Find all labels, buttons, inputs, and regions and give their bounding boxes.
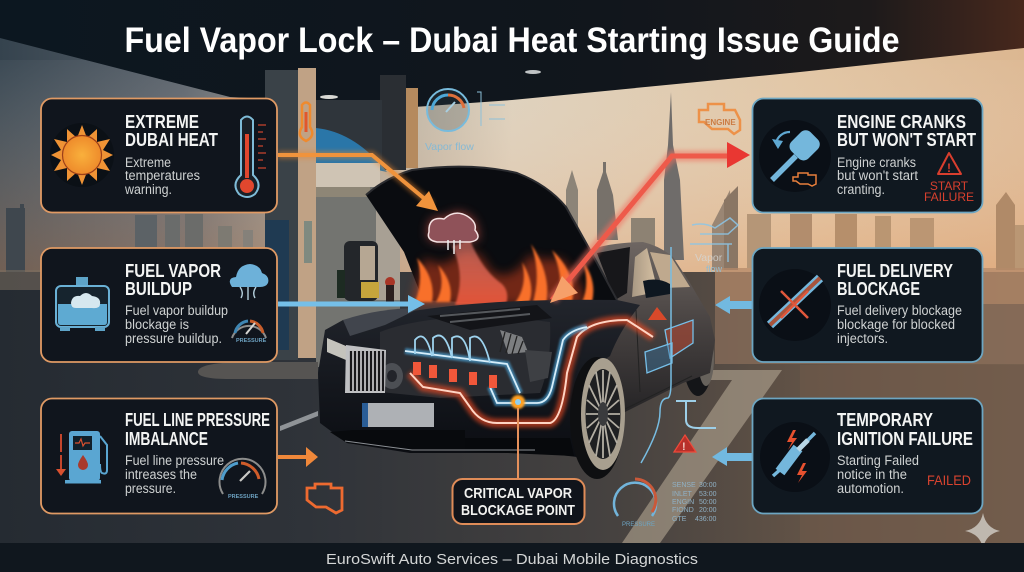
heading: BLOCKAGE bbox=[837, 279, 920, 299]
description: Fuel vapor buildup bbox=[125, 303, 228, 318]
description: automotion. bbox=[837, 481, 904, 496]
critical point glow bbox=[511, 395, 525, 409]
description: pressure buildup. bbox=[125, 331, 222, 346]
rear wheel bbox=[683, 320, 713, 396]
arrow: ignition to car bbox=[712, 447, 752, 466]
panel: fuel line pressure imbalance bbox=[41, 398, 277, 514]
arrow: blockage to car bbox=[715, 296, 752, 314]
parking line bbox=[622, 370, 782, 543]
heading: EXTREME bbox=[125, 112, 199, 132]
description bbox=[837, 155, 918, 197]
icon: check engine outline top: ENGINE bbox=[705, 118, 736, 127]
heading: IGNITION FAILURE bbox=[837, 429, 973, 449]
description bbox=[124, 155, 200, 197]
canopy lights bbox=[320, 95, 338, 99]
icon: cloud bbox=[230, 264, 268, 300]
blue station sign bbox=[265, 220, 289, 350]
description: Fuel delivery blockage bbox=[837, 303, 962, 318]
arrow: failure to start card bbox=[550, 142, 750, 303]
door shut line bbox=[623, 310, 692, 410]
icon: pressure gauge: PRESSURE bbox=[228, 494, 259, 500]
car bbox=[318, 167, 715, 479]
data gauge with readings: FIOND bbox=[672, 507, 694, 514]
footer band: EuroSwift Auto Services – Dubai Mobile Diagnostics bbox=[326, 552, 698, 568]
panel: extreme dubai heat bbox=[41, 98, 277, 212]
callout: critical vapor blockage point bbox=[452, 479, 584, 524]
vapor cloud icon in hood bbox=[427, 212, 479, 254]
flames under hood bbox=[412, 240, 593, 305]
icon: thermometer bbox=[235, 116, 266, 197]
icon: fuel pump bbox=[56, 431, 107, 484]
heading: IMBALANCE bbox=[125, 429, 208, 449]
station wall behind pump bbox=[316, 187, 400, 367]
icon: vapor flow schematic right bbox=[690, 218, 738, 274]
icon: start failure warning: ! bbox=[947, 161, 951, 175]
icon: pressure gauge: PRESSURE bbox=[236, 338, 267, 344]
icon: vapor flow schematic right: flow bbox=[706, 264, 723, 274]
canopy ceiling bbox=[0, 0, 1024, 108]
description: Starting Failed bbox=[837, 453, 919, 468]
description: Fuel line pressure bbox=[125, 453, 224, 468]
icon: check engine outline top bbox=[699, 104, 740, 134]
schematic line below car bbox=[641, 247, 671, 463]
heading: TEMPORARY bbox=[837, 410, 933, 430]
description: notice in the bbox=[837, 467, 907, 482]
heading: DUBAI HEAT bbox=[125, 130, 218, 150]
heading: BUT WON'T START bbox=[837, 130, 976, 150]
lower grille and lip bbox=[330, 430, 465, 451]
heading bbox=[837, 112, 976, 150]
panel: temporary ignition failure bbox=[752, 398, 982, 514]
windshield bbox=[597, 247, 630, 300]
arrow: vapor to engine bbox=[278, 295, 425, 313]
heading bbox=[837, 261, 953, 299]
description bbox=[125, 303, 228, 346]
description: blockage for blocked bbox=[837, 317, 955, 332]
arrow: heat into hood bbox=[278, 155, 438, 211]
panel: engine cranks but won't start bbox=[752, 98, 982, 212]
ground bbox=[0, 272, 1024, 572]
pump island bbox=[198, 362, 318, 379]
heading: ENGINE CRANKS bbox=[837, 112, 966, 132]
pillars bbox=[265, 70, 298, 360]
heading: FUEL LINE PRESSURE bbox=[125, 410, 270, 430]
description bbox=[837, 303, 962, 346]
icon: ground schematic and warning bbox=[674, 401, 716, 453]
heading: BUILDUP bbox=[125, 279, 192, 299]
data gauge with readings: 20:00 bbox=[699, 507, 717, 514]
description: warning. bbox=[124, 182, 172, 197]
icon: key with engine light bbox=[759, 120, 831, 192]
icon: ground schematic and warning: ! bbox=[682, 441, 686, 453]
side mirror bbox=[643, 280, 670, 298]
icon: vapor flow gauge: Vapor flow bbox=[425, 141, 474, 153]
data gauge with readings: 50:00 bbox=[699, 499, 717, 506]
callout: critical vapor blockage point: CRITICAL VAPOR bbox=[464, 485, 572, 502]
data gauge with readings: ENGIN bbox=[672, 499, 694, 506]
icon: vapor flow gauge bbox=[425, 89, 505, 153]
description: cranting. bbox=[837, 182, 885, 197]
heading bbox=[125, 410, 270, 449]
fuel line glowing pipes bbox=[405, 320, 653, 423]
description: pressure. bbox=[125, 481, 176, 496]
warning on car door bbox=[648, 307, 667, 320]
icon: blocked fuel line bbox=[759, 269, 831, 341]
panel: fuel delivery blockage bbox=[752, 248, 982, 362]
cabin and rear body bbox=[560, 242, 715, 440]
arrow: pressure to check engine bbox=[278, 447, 318, 467]
description: temperatures bbox=[125, 168, 200, 183]
sparkle watermark bbox=[965, 513, 1000, 548]
title: Fuel Vapor Lock – Dubai Heat Starting Issue Guide bbox=[124, 21, 900, 60]
headlight bbox=[327, 338, 346, 360]
heading bbox=[125, 112, 218, 150]
description: intreases the bbox=[125, 467, 197, 482]
icon: engine light outline lower left bbox=[307, 484, 342, 513]
icon: spark plug bbox=[760, 422, 830, 492]
icon: start failure warning: FAILURE bbox=[924, 190, 974, 204]
battery wireframes bbox=[645, 320, 693, 373]
icon: start failure warning bbox=[924, 153, 974, 204]
description: blockage is bbox=[125, 317, 189, 332]
footer band bbox=[0, 543, 1024, 572]
side windows bbox=[632, 248, 658, 297]
injectors bbox=[413, 362, 497, 388]
description: Extreme bbox=[125, 155, 171, 170]
icon: sun bbox=[50, 123, 114, 187]
heading bbox=[837, 410, 973, 449]
description: Engine cranks bbox=[837, 155, 916, 170]
grille bbox=[345, 345, 386, 393]
engine bay bbox=[380, 316, 550, 398]
heading: FUEL VAPOR bbox=[125, 261, 221, 281]
icon: pressure gauge bbox=[220, 459, 265, 500]
icon: vapor flow schematic right: Vapor bbox=[695, 252, 723, 264]
skyline: center and right towers bbox=[566, 92, 1024, 270]
fuel pump bbox=[337, 241, 395, 305]
front wheel bbox=[570, 357, 624, 479]
fender and front body bbox=[318, 300, 640, 457]
description bbox=[125, 453, 224, 496]
data gauge with readings: 53:00 bbox=[699, 491, 717, 498]
icon: start failure warning: START bbox=[930, 179, 969, 193]
data gauge with readings bbox=[614, 479, 717, 528]
data gauge with readings: PRESSURE bbox=[622, 522, 655, 528]
hood deck highlight bbox=[343, 308, 420, 336]
data gauge with readings: INLET bbox=[672, 491, 693, 498]
icon: pillar thermometer bbox=[300, 102, 312, 141]
panel: fuel vapor buildup bbox=[41, 248, 277, 362]
skyline: left towers bbox=[6, 204, 253, 274]
data gauge with readings: 436:00 bbox=[695, 516, 717, 523]
callout line to critical point bbox=[517, 408, 519, 478]
open hood bbox=[366, 167, 617, 306]
data gauge with readings: 30:00 bbox=[699, 482, 717, 489]
icon: fuel tank with vapor bbox=[56, 277, 109, 331]
failed label: FAILED bbox=[927, 472, 971, 488]
description bbox=[837, 453, 919, 496]
data gauge with readings: GTE bbox=[672, 516, 687, 523]
heading: FUEL DELIVERY bbox=[837, 261, 953, 281]
callout: critical vapor blockage point: BLOCKAGE POINT bbox=[461, 502, 575, 519]
heading bbox=[125, 261, 221, 299]
description: injectors. bbox=[837, 331, 888, 346]
icon: pressure gauge bbox=[232, 321, 267, 344]
number plate bbox=[362, 403, 434, 427]
description: but won't start bbox=[837, 168, 918, 183]
data gauge with readings: SENSE bbox=[672, 482, 696, 489]
